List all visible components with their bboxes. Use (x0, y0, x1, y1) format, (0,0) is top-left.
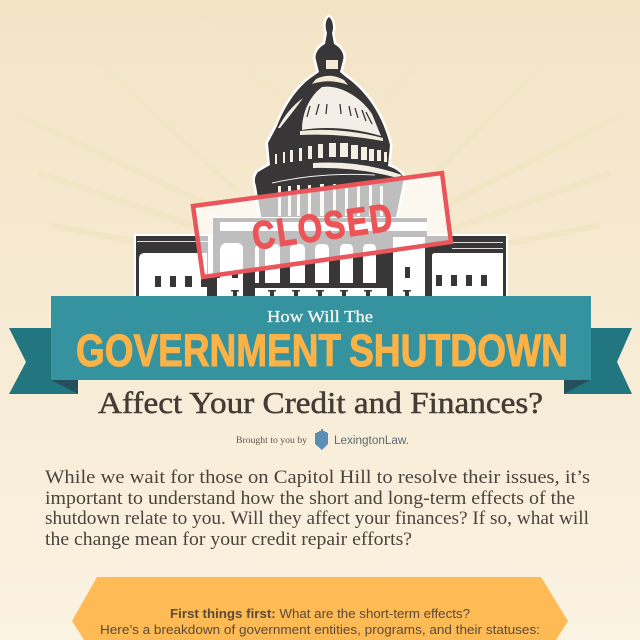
right wing (423, 234, 508, 298)
lantern and cap highlights (326, 60, 338, 69)
lower drum columns (278, 184, 383, 216)
intro paragraph: the change mean for your credit repair efforts? (45, 530, 412, 550)
intro paragraph: While we wait for those on Capitol Hill to resolve their issues, it’s (45, 468, 590, 488)
central portico (207, 217, 432, 296)
closed stamp (193, 173, 451, 277)
dome (255, 17, 404, 222)
ribbon face (51, 296, 591, 380)
base plinth (255, 288, 387, 296)
portico columns (255, 244, 376, 283)
capitol building illustration (134, 17, 508, 298)
intro paragraph: important to understand how the short and long-term effects of the (45, 489, 575, 509)
heading: how will the: How Will The (267, 307, 373, 326)
right ribbon tail (564, 328, 632, 394)
right ribbon fold (564, 380, 590, 394)
heading: government shutdown: SHUTDOWN (349, 325, 568, 376)
callout text: First things first: What are the short-term effects? (170, 607, 470, 621)
closed label: CLOSED (249, 196, 395, 258)
subtitle: Affect Your Credit and Finances? (98, 385, 543, 420)
sponsor line (236, 429, 409, 450)
dome upper shell (302, 87, 381, 136)
left ribbon tail (9, 328, 78, 394)
dome colonnade windows (275, 143, 387, 164)
intro paragraph (45, 468, 590, 550)
heading: government shutdown: GOVERNMENT (76, 325, 341, 376)
intro paragraph: shutdown relate to you. Will they affect your finances? If so, what will (45, 509, 589, 529)
sponsor line: LexingtonLaw. (334, 435, 409, 447)
ribbon banner (9, 296, 632, 394)
callout hexagon (72, 577, 568, 640)
left wing (134, 234, 218, 298)
sponsor line: Brought to you by (236, 436, 307, 446)
icon: lexington law hand (315, 429, 328, 450)
heading: government shutdown (76, 325, 568, 376)
left ribbon fold (51, 380, 78, 394)
callout hexagon: Here’s a breakdown of government entities, programs, and their statuses: (100, 623, 540, 637)
